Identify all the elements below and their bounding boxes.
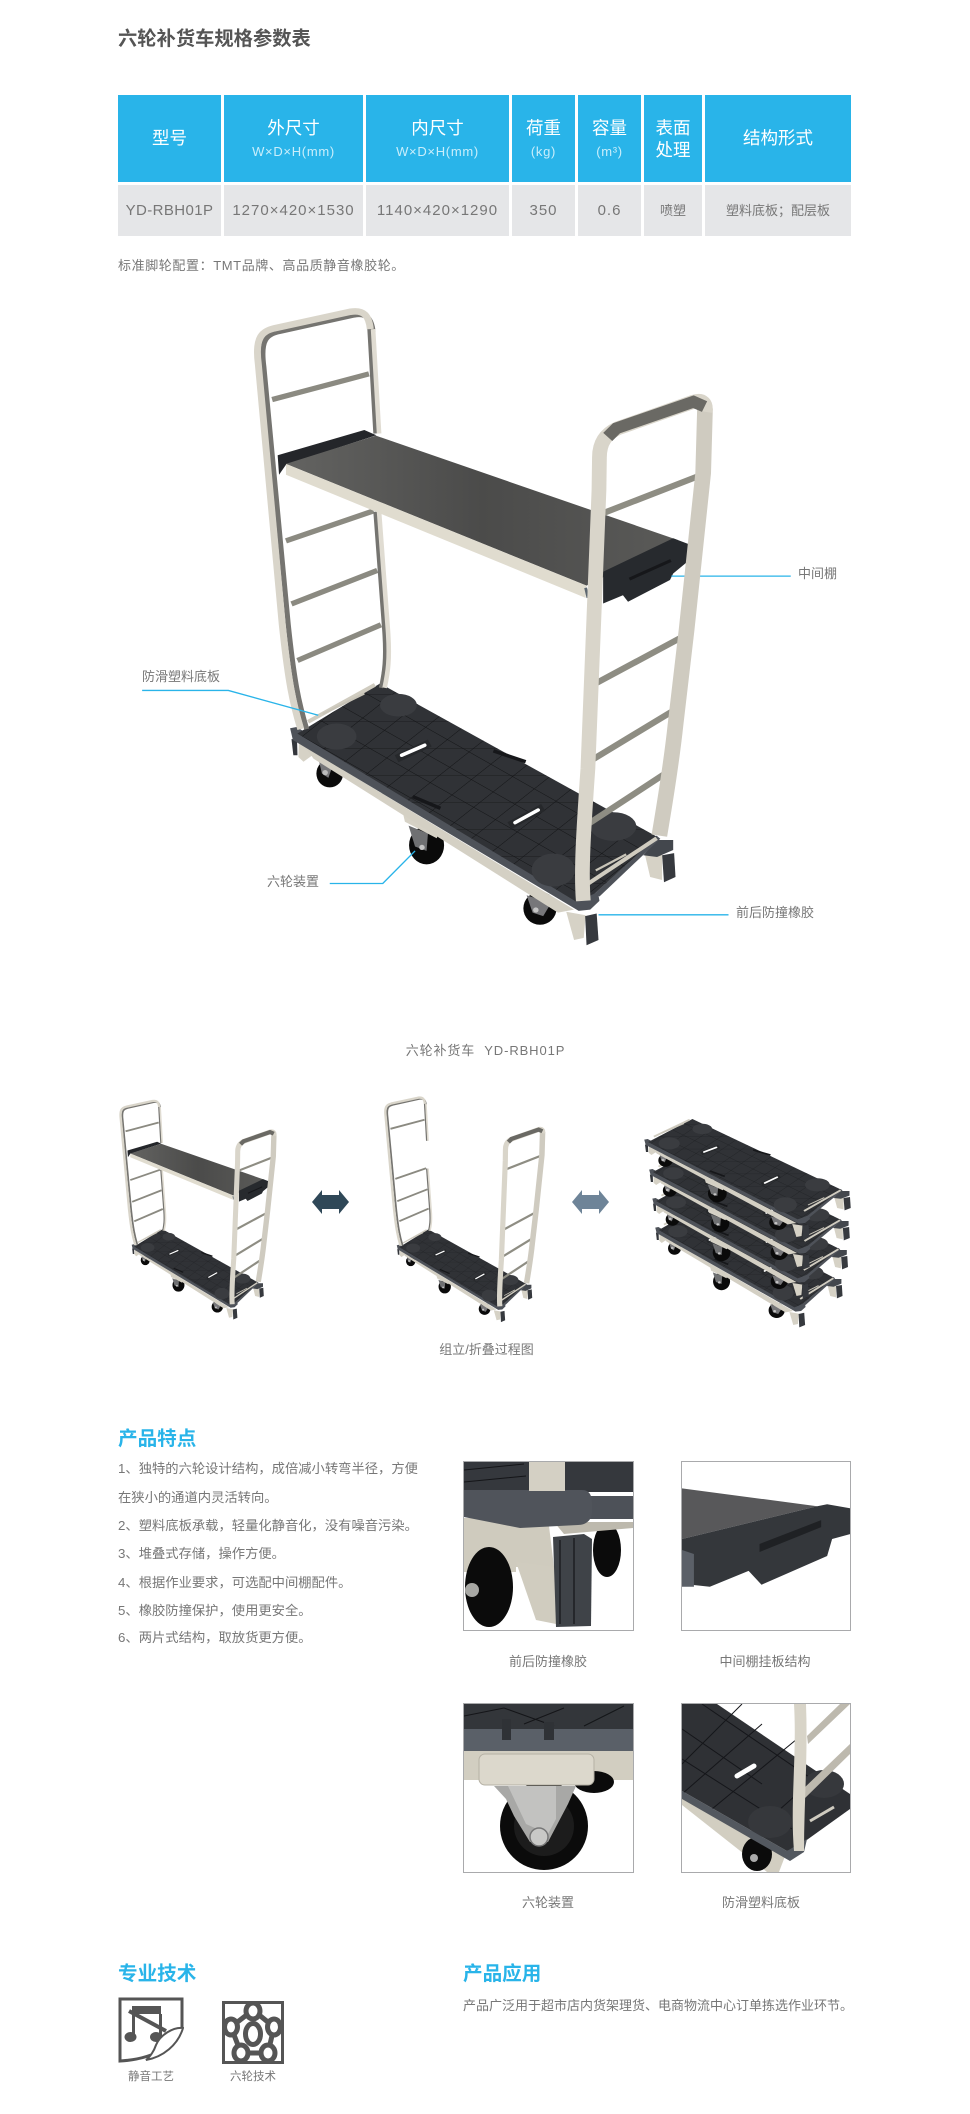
feature 1 line 2: 在狭小的通道内灵活转向。 (118, 1490, 278, 1505)
header: inner size: 内尺寸 (411, 118, 464, 138)
feature 1 line 1: 1、独特的六轮设计结构，成倍减小转弯半径，方便 (118, 1461, 418, 1476)
header: model (118, 95, 221, 182)
small cart without shelf (384, 1096, 546, 1322)
header: model: 型号 (152, 128, 187, 148)
arrow: light double arrow (572, 1190, 609, 1214)
cell: finish: 喷塑 (660, 203, 686, 218)
header: finish (644, 95, 702, 182)
cell: finish (644, 185, 702, 236)
detail photo: anti-slip base (681, 1703, 851, 1873)
cell: inner size (366, 185, 509, 236)
callout: anti-slip plastic base: 防滑塑料底板 (142, 669, 220, 684)
cell: inner size: 1140×420×1290 (377, 202, 498, 219)
cell: outer size (224, 185, 363, 236)
cell: load: 350 (529, 202, 558, 219)
main cart illustration (142, 308, 791, 946)
header: structure: 结构形式 (743, 128, 813, 148)
header: structure (705, 95, 851, 182)
cell: load (512, 185, 575, 236)
feature 4: 4、根据作业要求，可选配中间棚配件。 (118, 1575, 351, 1590)
icon label: silent process: 静音工艺 (128, 2071, 174, 2083)
cell: volume (578, 185, 641, 236)
detail label: bumper: 前后防撞橡胶 (509, 1654, 587, 1669)
stacked bases (644, 1119, 851, 1328)
specification table (118, 95, 851, 236)
cell: outer size: 1270×420×1530 (232, 202, 355, 219)
title: 六轮补货车规格参数表 (118, 29, 311, 50)
detail photo: shelf hanger (681, 1461, 851, 1631)
header: load: 荷重 (526, 118, 561, 138)
header: load (512, 95, 575, 182)
icon label: six-wheel technology: 六轮技术 (230, 2071, 276, 2083)
header: load: (kg) (531, 144, 556, 159)
icon: silent process (118, 1998, 184, 2063)
feature 5: 5、橡胶防撞保护，使用更安全。 (118, 1603, 312, 1618)
header: volume: (m³) (596, 144, 623, 159)
header: finish: 表面 (656, 118, 690, 138)
callout: middle shelf: 中间棚 (798, 566, 837, 581)
header: volume (578, 95, 641, 182)
cell: structure: 塑料底板；配层板 (726, 203, 830, 218)
feature 2: 2、塑料底板承载，轻量化静音化，没有噪音污染。 (118, 1518, 418, 1533)
cell: model: YD-RBH01P (126, 202, 213, 219)
icon: six-wheel technology (222, 2001, 284, 2064)
callout: six-wheel unit: 六轮装置 (267, 874, 319, 889)
heading: technology: 专业技术 (118, 1963, 196, 1985)
application text: 产品广泛用于超市店内货架理货、电商物流中心订单拣选作业环节。 (463, 1998, 853, 2013)
header: outer size: 外尺寸 (267, 118, 320, 138)
cell: structure (705, 185, 851, 236)
detail label: anti-slip base: 防滑塑料底板 (722, 1895, 800, 1910)
arrow: dark double arrow (312, 1190, 349, 1214)
process caption: 组立/折叠过程图 (439, 1342, 534, 1357)
cell: volume: 0.6 (598, 202, 621, 219)
heading: application: 产品应用 (463, 1963, 541, 1985)
header: volume: 容量 (592, 118, 627, 138)
detail photo: bumper (463, 1461, 634, 1631)
feature list (118, 1461, 418, 1645)
feature 6: 6、两片式结构，取放货更方便。 (118, 1630, 312, 1645)
detail photo: six-wheel unit (463, 1703, 634, 1873)
header: outer size (224, 95, 363, 182)
small cart with shelf (119, 1100, 277, 1320)
heading: features: 产品特点 (118, 1428, 196, 1450)
header: finish: 处理 (656, 140, 690, 160)
feature 3: 3、堆叠式存储，操作方便。 (118, 1546, 285, 1561)
main cart caption: 六轮补货车 YD-RBH01P (406, 1043, 565, 1058)
header: outer size: W×D×H(mm) (252, 144, 335, 159)
detail label: shelf hanger: 中间棚挂板结构 (719, 1654, 810, 1669)
callout: bumper rubber: 前后防撞橡胶 (736, 905, 814, 920)
table note: 标准脚轮配置：TMT品牌、高品质静音橡胶轮。 (118, 258, 405, 273)
detail label: six-wheel unit: 六轮装置 (522, 1895, 574, 1910)
cell: model (118, 185, 221, 236)
header: inner size (366, 95, 509, 182)
header: inner size: W×D×H(mm) (396, 144, 479, 159)
